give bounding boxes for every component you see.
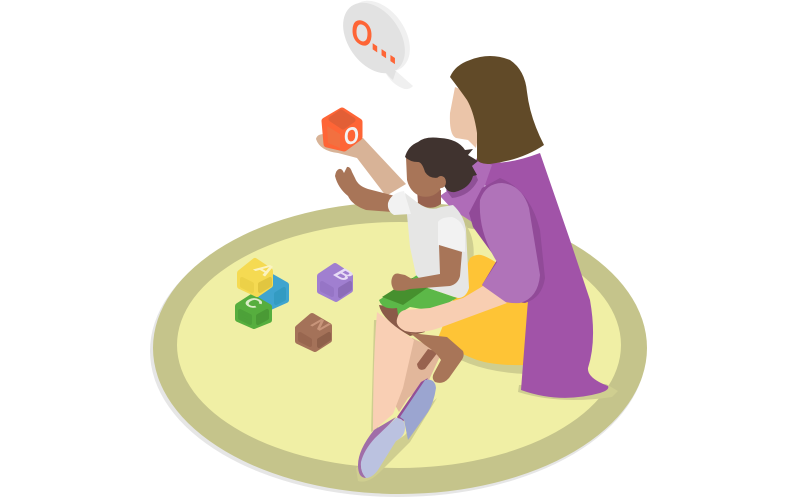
speech letter O: O: [350, 10, 374, 56]
letter O: O: [344, 121, 359, 150]
hair shadow on dress: [446, 170, 478, 198]
mother's far leg: [395, 338, 442, 412]
mother's raised arm and hand: [316, 134, 406, 196]
brown block N: [298, 316, 336, 349]
orange block O in mother's hand: [325, 111, 359, 150]
child's front leg: [410, 333, 464, 383]
letter N: N: [306, 316, 336, 333]
mother's upper arm sleeve: [480, 183, 540, 303]
mother's dress: [477, 153, 608, 398]
mother's forearm and hand: [397, 286, 507, 332]
sleeve shadow: [469, 178, 545, 303]
child's ear: [436, 176, 446, 188]
child's hair: [405, 138, 478, 192]
speech dots: ...: [370, 12, 397, 75]
letter A: A: [248, 260, 281, 279]
green block C: [238, 294, 269, 326]
blue block: [260, 277, 286, 308]
mother's hair and face: [450, 56, 544, 164]
back shoe: [397, 378, 436, 440]
child's underside shadow: [379, 305, 425, 336]
front shoe: [358, 417, 405, 478]
speech bubble: [330, 0, 423, 89]
child's back leg: [417, 349, 438, 370]
letter B: B: [327, 266, 359, 284]
round rug: [150, 202, 647, 497]
child's t-shirt: [388, 191, 469, 298]
mother's near leg: [373, 312, 414, 431]
child's shorts: [379, 275, 457, 317]
mother's back behind child: [440, 158, 492, 222]
yellow cushion: [438, 255, 528, 365]
letter C: C: [239, 294, 269, 311]
purple block B: [320, 266, 359, 299]
figure shadows on rug: [356, 225, 618, 482]
yellow block A: [240, 260, 281, 294]
child's neck and head: [406, 148, 445, 208]
child's far arm: [335, 167, 395, 212]
child's near arm: [391, 245, 462, 291]
